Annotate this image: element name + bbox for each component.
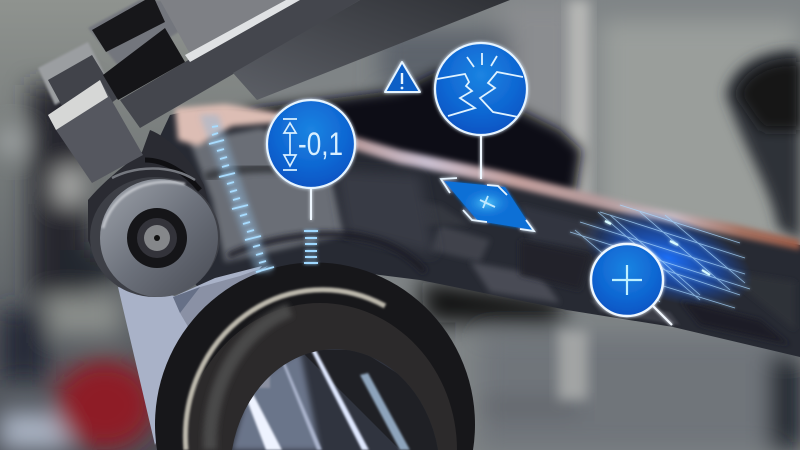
magnifier icon: plus [591,244,672,325]
measurement scale along roller [200,115,274,272]
crack callout [435,43,527,179]
thickness callout: -0,1 [267,100,355,263]
warning triangle icon [385,62,420,92]
defect patch on belt [441,178,534,231]
lighter bracket block over roller [48,80,143,183]
big roller end ring [155,262,475,450]
glowing grid defect area [570,191,765,325]
thickness callout: -0,1: -0,1 [298,126,343,162]
main roller body [118,104,435,445]
small pinch roller [88,130,220,297]
belt running across the roller [130,109,800,357]
upper bracket arm [38,0,510,130]
